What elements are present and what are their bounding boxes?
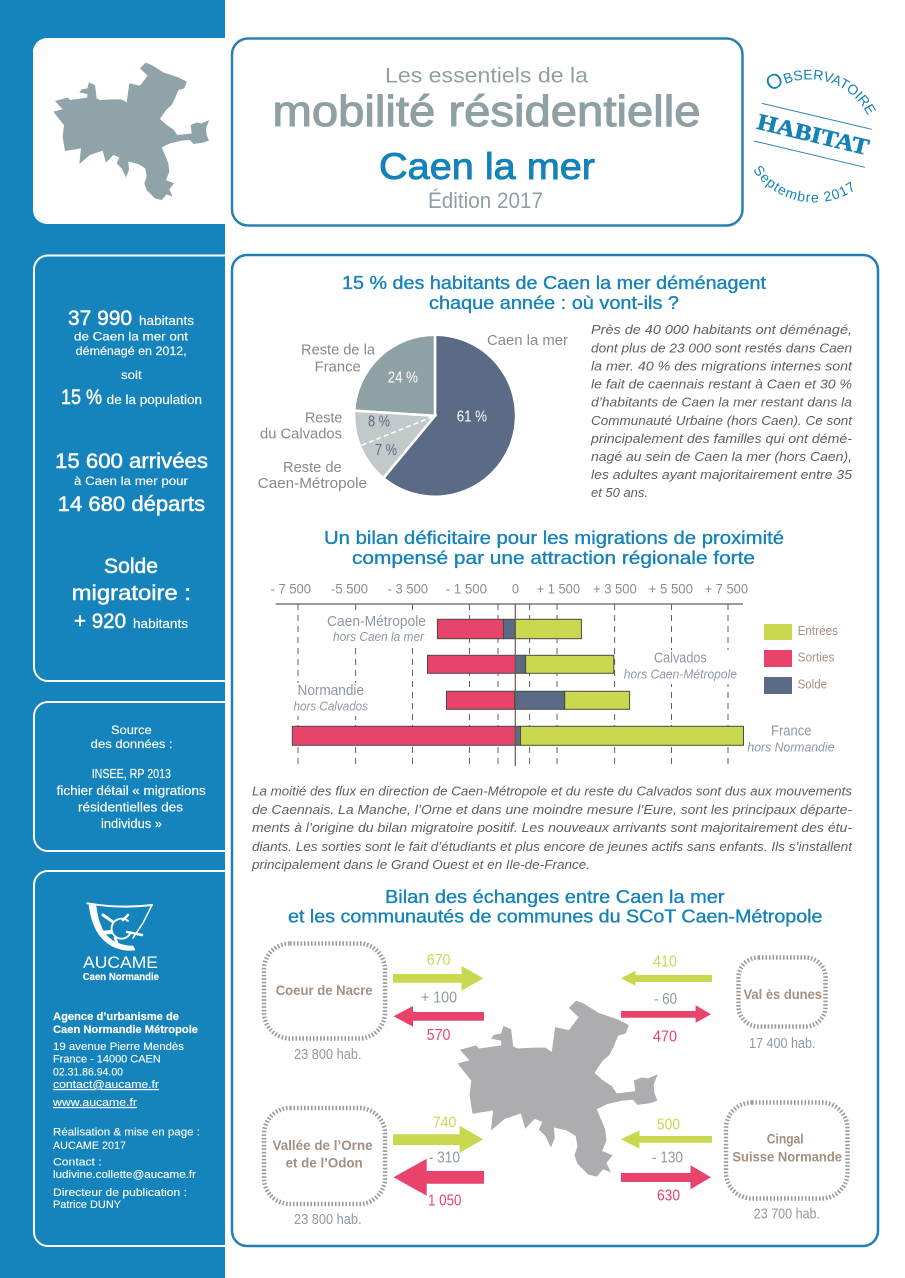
bar chart: migration balance: hors Normandie <box>747 740 834 755</box>
panel: data source: Source <box>111 723 152 737</box>
heading: section 3 <box>288 886 822 927</box>
bar chart: migration balance: - 7 500 <box>271 580 311 596</box>
pie chart <box>258 333 568 497</box>
bar chart: migration balance: + 5 500 <box>649 580 693 596</box>
flow: Vallée de l'Orne et de l'Odon: et de l’Odon <box>286 1155 363 1171</box>
flow: Coeur de Nacre: 670 <box>427 952 451 969</box>
panel: key figures: de la population <box>107 393 202 407</box>
panel: publisher: Contact : <box>53 1157 102 1169</box>
legend: bar chart: Entrées <box>798 624 838 638</box>
flow: Cingal Suisse Normande: Suisse Normande <box>732 1149 842 1165</box>
legend: bar chart <box>764 624 838 694</box>
flow: Coeur de Nacre <box>264 944 484 1063</box>
panel: data source: des données : <box>91 737 173 751</box>
panel: publisher: ludivine.collette@aucame.fr <box>53 1169 196 1181</box>
panel: publisher: contact@aucame.fr <box>53 1079 159 1091</box>
panel: data source <box>34 702 225 851</box>
panel: main content frame <box>232 255 878 1246</box>
flow: Val ès dunes: 410 <box>653 954 677 971</box>
bar chart: migration balance: hors Caen la mer <box>333 629 425 644</box>
pie chart: Reste <box>305 411 342 427</box>
text block: flows commentary: ments à l’origine du bilan migratoire positif. Les nouveaux arrivants sont majoritairement des étu- <box>252 820 853 835</box>
heading: section 1 <box>342 272 766 313</box>
panel: key figures: déménagé en 2012, <box>76 344 187 358</box>
pie chart: 7 % <box>375 442 397 459</box>
flow: Coeur de Nacre: Coeur de Nacre <box>276 982 373 998</box>
panel: map thumbnail <box>33 38 225 224</box>
pie chart: du Calvados <box>260 426 342 442</box>
panel: key figures: de Caen la mer ont <box>74 330 189 344</box>
panel: publisher: Réalisation & mise en page : <box>53 1127 200 1139</box>
map: Caen la mer centre <box>458 1001 658 1177</box>
panel: key figures: migratoire : <box>72 582 191 605</box>
heading: section 1: 15 % des habitants de Caen la mer déménagent <box>342 272 766 293</box>
pie chart: France <box>315 360 361 376</box>
flow: Coeur de Nacre: 23 800 hab. <box>294 1047 362 1063</box>
bar chart: migration balance: Caen-Métropole <box>327 614 426 630</box>
pie chart: Reste de <box>283 460 342 476</box>
icon: AUCAME logo <box>87 903 152 950</box>
panel: key figures: 15 600 arrivées <box>55 450 208 473</box>
panel: publisher: Caen Normandie Métropole <box>53 1024 198 1036</box>
sidebar background <box>0 0 225 1278</box>
text block: residential moves: d’habitants de Caen la mer restant dans la <box>591 394 852 410</box>
panel: key figures: 15 % <box>61 386 102 409</box>
panel: data source: résidentielles des <box>78 801 183 815</box>
panel: key figures: habitants <box>133 617 188 631</box>
text: title line 1: Les essentiels de la <box>385 65 588 88</box>
legend: bar chart: Solde <box>798 677 827 691</box>
heading: section 3: et les communautés de communes du SCoT Caen-Métropole <box>288 906 822 927</box>
panel: data source: INSEE, RP 2013 <box>92 767 171 781</box>
heading: mobilité résidentielle: mobilité résidentielle <box>272 87 700 136</box>
flow: Cingal Suisse Normande: 23 700 hab. <box>754 1207 820 1223</box>
panel: key figures: à Caen la mer pour <box>74 474 188 488</box>
panel: key figures: 37 990 <box>68 307 132 330</box>
flow: Cingal Suisse Normande: Cingal <box>767 1130 804 1146</box>
heading: section 3: Bilan des échanges entre Caen la mer <box>385 886 724 907</box>
flow: Val ès dunes: Val ès dunes <box>744 986 822 1002</box>
stamp: Observatoire Habitat: OBSERVATOIRE <box>766 70 876 116</box>
text block: flows commentary: La moitié des flux en direction de Caen-Métropole et du reste du Calvados sont dus aux mouvements <box>252 784 853 799</box>
flow: Coeur de Nacre: + 100 <box>421 990 457 1007</box>
text block: flows commentary: diants. Les sorties sont le fait d’étudiants et plus encore de jeunes actifs sans enfants. Ils s’installent <box>252 839 853 854</box>
bar chart: migration balance: - 1 500 <box>446 580 487 596</box>
panel: publisher: Patrice DUNY <box>53 1199 122 1211</box>
legend: bar chart: Sorties <box>798 651 834 665</box>
text block: residential moves: principalement des familles qui ont démé- <box>590 431 853 446</box>
text block: flows commentary: principalement dans le Grand Ouest et en Ile-de-France. <box>251 857 590 872</box>
heading: section 1: chaque année : où vont-ils ? <box>429 292 679 313</box>
pie chart: Reste de la <box>301 342 376 358</box>
panel: key figures: Solde <box>104 555 158 578</box>
pie chart: 61 % <box>457 409 487 426</box>
panel: key figures: habitants <box>139 314 194 328</box>
flow: Cingal Suisse Normande: 500 <box>657 1116 680 1133</box>
flow: Vallée de l'Orne et de l'Odon: - 310 <box>429 1150 460 1167</box>
flow: Coeur de Nacre: 570 <box>427 1027 451 1044</box>
panel: publisher: 02.31.86.94.00 <box>53 1067 123 1079</box>
panel: publisher <box>34 871 225 1246</box>
panel: key figures: soit <box>121 368 142 382</box>
flow: Val ès dunes: - 60 <box>654 991 677 1008</box>
bar chart: migration balance: + 7 500 <box>705 580 748 596</box>
bar chart: migration balance: hors Caen-Métropole <box>624 666 737 681</box>
flow: Val ès dunes <box>621 954 826 1052</box>
bar chart: migration balance: hors Calvados <box>294 699 368 714</box>
flow: Val ès dunes: 470 <box>653 1029 677 1046</box>
panel: key figures <box>34 256 225 681</box>
bar chart: migration balance: -5 500 <box>331 580 368 596</box>
text block: flows commentary: de Caennais. La Manche, l’Orne et dans une moindre mesure l’Eure, sont les principaux départe- <box>252 802 853 817</box>
text block: residential moves <box>590 322 854 500</box>
panel: publisher: www.aucame.fr <box>52 1097 137 1109</box>
text block: residential moves: Communauté Urbaine (hors Caen). Ce sont <box>591 413 853 428</box>
flow: Vallée de l'Orne et de l'Odon <box>264 1108 484 1228</box>
pie chart: 8 % <box>368 414 390 431</box>
panel: publisher: AUCAME 2017 <box>53 1140 126 1152</box>
flow: Vallée de l'Orne et de l'Odon: 740 <box>433 1115 457 1132</box>
text block: residential moves: le fait de caennais restant à Caen et 30 % <box>591 376 852 392</box>
bar chart: migration balance: 0 <box>512 580 519 596</box>
icon: territory map <box>53 63 209 200</box>
panel: title <box>232 38 742 226</box>
heading: section 2: compensé par une attraction régionale forte <box>352 547 755 568</box>
flow: Vallée de l'Orne et de l'Odon: 23 800 hab. <box>294 1212 362 1228</box>
flow: Vallée de l'Orne et de l'Odon: Vallée de l’Orne <box>272 1137 373 1153</box>
stamp: Observatoire Habitat <box>754 70 876 203</box>
panel: data source: fichier détail « migrations <box>57 784 206 798</box>
bar chart: migration balance: + 3 500 <box>593 580 637 596</box>
stamp: Observatoire Habitat: Septembre 2017 <box>754 166 853 203</box>
text block: residential moves: et 50 ans. <box>591 485 648 500</box>
flow: Cingal Suisse Normande: - 130 <box>652 1150 683 1167</box>
panel: key figures: 14 680 départs <box>58 493 205 516</box>
panel: publisher: Agence d’urbanisme de <box>53 1011 179 1023</box>
flow: Val ès dunes: 17 400 hab. <box>749 1036 816 1052</box>
stamp: Observatoire Habitat: HABITAT <box>755 109 871 160</box>
text block: flows commentary <box>251 784 853 872</box>
text: edition: Édition 2017 <box>428 188 543 213</box>
bar chart: migration balance: - 3 500 <box>388 580 428 596</box>
bar chart: migration balance: France <box>771 724 812 740</box>
text block: residential moves: dont plus de 23 000 sont restés dans Caen <box>591 340 852 356</box>
text block: residential moves: nagé au sein de Caen la mer (hors Caen), <box>591 449 852 464</box>
heading: section 2 <box>324 527 784 568</box>
bar chart: migration balance: Calvados <box>654 651 707 667</box>
pie chart: Caen-Métropole <box>258 476 367 492</box>
panel: publisher: Caen Normandie <box>83 972 159 983</box>
pie chart: 24 % <box>388 370 418 387</box>
bar chart: migration balance: + 1 500 <box>537 580 580 596</box>
flow: Cingal Suisse Normande <box>621 1102 848 1223</box>
flow: Cingal Suisse Normande: 630 <box>657 1188 680 1205</box>
text block: residential moves: la mer. 40 % des migrations internes sont <box>591 358 854 374</box>
text block: residential moves: les adultes ayant majoritairement entre 35 <box>591 467 853 482</box>
panel: publisher: France - 14000 CAEN <box>53 1054 161 1066</box>
bar chart: migration balance <box>271 580 834 766</box>
panel: publisher: AUCAME <box>83 954 158 972</box>
pie chart: Caen la mer <box>487 333 568 349</box>
panel: publisher: 19 avenue Pierre Mendès <box>53 1041 185 1053</box>
panel: data source: individus » <box>101 817 162 831</box>
heading: section 2: Un bilan déficitaire pour les migrations de proximité <box>324 527 784 548</box>
bar chart: migration balance: Normandie <box>298 683 364 699</box>
heading: Caen la mer: Caen la mer <box>379 146 595 187</box>
flow: Vallée de l'Orne et de l'Odon: 1 050 <box>428 1193 462 1210</box>
text block: residential moves: Près de 40 000 habitants ont déménagé, <box>591 322 852 337</box>
panel: publisher: Directeur de publication : <box>53 1187 187 1199</box>
panel: key figures: + 920 <box>74 610 126 633</box>
